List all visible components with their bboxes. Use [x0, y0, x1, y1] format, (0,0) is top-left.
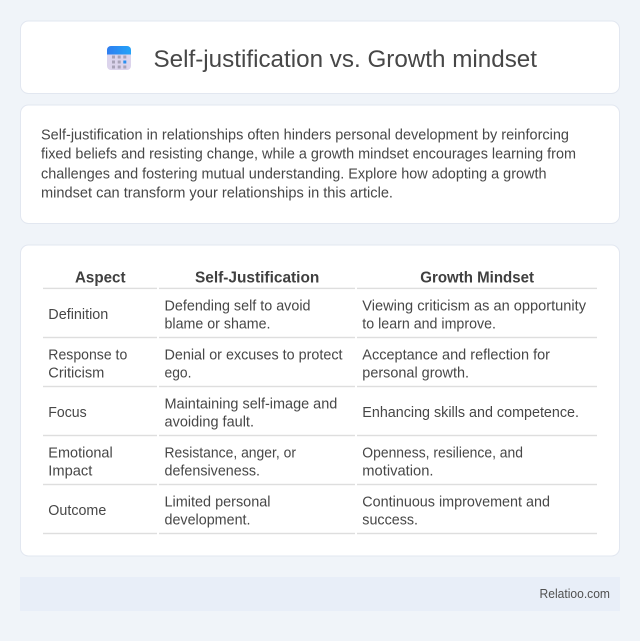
- row: definition: [48, 298, 587, 332]
- row: outcome: success.: [362, 512, 418, 528]
- table header: Self-Justification: [195, 270, 319, 287]
- footer: [20, 577, 620, 611]
- table header: Growth Mindset: [420, 270, 534, 287]
- row: outcome: [48, 494, 550, 528]
- row: emotional impact: defensiveness.: [164, 463, 260, 479]
- row: outcome: Outcome: [48, 503, 106, 519]
- row: response to criticism: Acceptance and reflection for: [362, 347, 550, 363]
- row: outcome: Limited personal: [164, 494, 270, 510]
- row: emotional impact: Openness, resilience, and: [362, 445, 523, 461]
- row: definition: Defending self to avoid: [164, 298, 310, 314]
- intro text: challenges and fostering mutual understanding. Explore how adopting a growth: [41, 166, 546, 182]
- row: emotional impact: motivation.: [362, 463, 434, 479]
- row: definition: to learn and improve.: [362, 316, 496, 332]
- row: emotional impact: Impact: [48, 463, 92, 479]
- icon: calendar: [107, 46, 131, 70]
- panel: title card: [20, 21, 620, 94]
- row: focus: Maintaining self-image and: [164, 396, 337, 412]
- footer credit: Relatioo.com: [540, 587, 610, 601]
- table header: [75, 270, 534, 287]
- row: focus: Focus: [48, 405, 87, 421]
- panel: comparison table: [20, 245, 620, 556]
- row: response to criticism: ego.: [164, 365, 192, 381]
- title: Self-justification vs. Growth mindset: [154, 46, 537, 73]
- table header: Aspect: [75, 270, 126, 287]
- row: emotional impact: [48, 445, 523, 479]
- row: focus: avoiding fault.: [164, 414, 254, 430]
- row: emotional impact: Emotional: [48, 445, 113, 461]
- intro text: fixed beliefs and resisting change, while a growth mindset encourages learning from: [41, 146, 576, 162]
- row: definition: Viewing criticism as an opportunity: [362, 298, 587, 314]
- row: response to criticism: Criticism: [48, 365, 104, 381]
- row: definition: blame or shame.: [164, 316, 270, 332]
- row: focus: [48, 396, 579, 430]
- row: response to criticism: [48, 347, 550, 381]
- row: response to criticism: personal growth.: [362, 365, 469, 381]
- row: definition: Definition: [48, 307, 108, 323]
- row: response to criticism: Response to: [48, 347, 127, 363]
- row: response to criticism: Denial or excuses to protect: [164, 347, 342, 363]
- intro text: Self-justification in relationships often hinders personal development by reinforcing: [41, 127, 569, 143]
- row: outcome: development.: [164, 512, 250, 528]
- row: focus: Enhancing skills and competence.: [362, 405, 579, 421]
- intro text: mindset can transform your relationships in this article.: [41, 185, 393, 201]
- panel: introduction: [20, 105, 620, 224]
- intro text: [41, 127, 576, 201]
- row: emotional impact: Resistance, anger, or: [164, 445, 296, 461]
- row: outcome: Continuous improvement and: [362, 494, 550, 510]
